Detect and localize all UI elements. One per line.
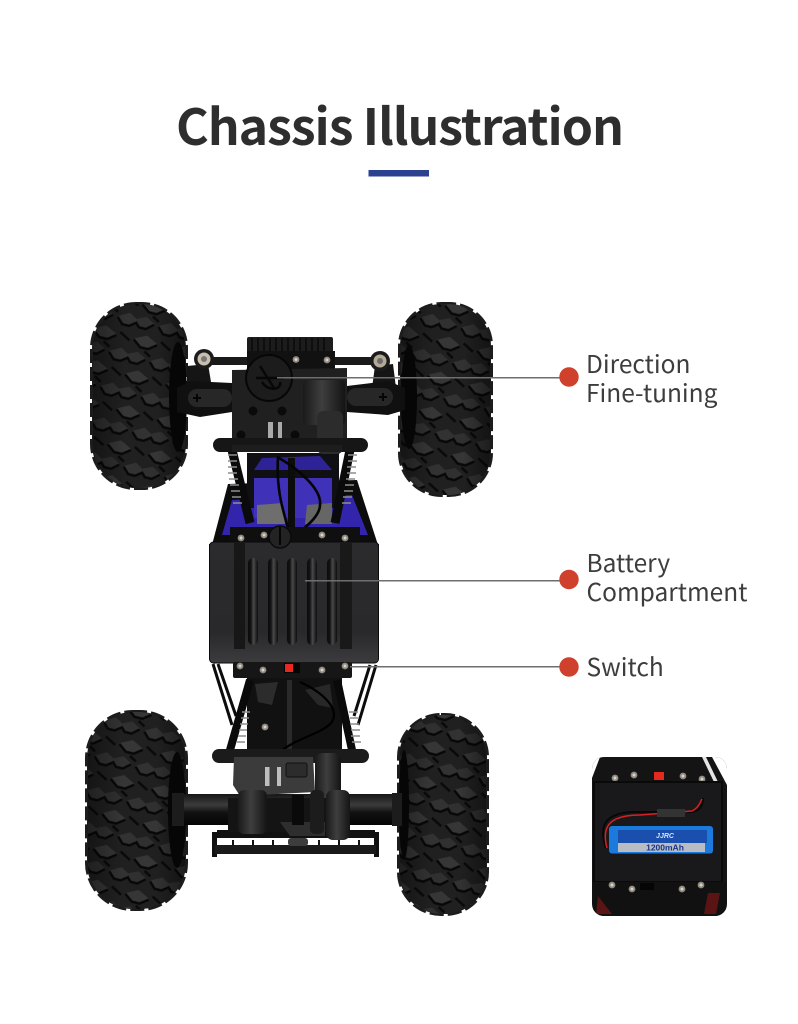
label: battery compartment: Battery: [586, 545, 670, 580]
inset photo: open battery compartment: JJRC: [656, 833, 675, 840]
rear gearbox cover: [233, 757, 315, 796]
marker dot: battery compartment: [559, 570, 579, 589]
tire: rear right: [399, 715, 487, 914]
label: switch: Switch: [586, 649, 664, 684]
inset bottom edge: [593, 909, 726, 916]
label: direction fine-tuning: Fine-tuning: [586, 375, 718, 410]
inset photo: open battery compartment: [592, 757, 727, 916]
tie rod: [204, 357, 380, 365]
inset battery: [609, 826, 713, 854]
tuning dial: [246, 355, 292, 401]
inset photo: open battery compartment: 1200mAh: [646, 842, 684, 852]
title: Chassis Illustration: [176, 88, 624, 160]
top motor block: [247, 337, 333, 353]
axle arms: [177, 381, 232, 417]
differential bulges: [228, 798, 350, 832]
front axle and steering: [177, 337, 405, 454]
motor cylinder: [303, 380, 345, 425]
label: direction fine-tuning: Direction: [586, 346, 690, 381]
inset top switch: [654, 772, 664, 780]
knuckles: [187, 364, 212, 388]
marker dot: switch: [559, 657, 579, 677]
gearbox: [232, 368, 347, 452]
label: battery compartment: Compartment: [586, 574, 747, 609]
rear shock bar: [212, 749, 369, 763]
rear bumper: [212, 830, 379, 857]
diagram: rock crawler chassis: [87, 304, 491, 914]
power switch plate: [233, 662, 352, 678]
tire: front left: [92, 304, 187, 488]
front and rear struts with springs: [228, 450, 361, 750]
tire: front right: [400, 304, 491, 495]
marker dot: direction fine-tuning: [559, 367, 579, 387]
inset compartment box: [594, 782, 722, 882]
leader line: direction fine-tuning: [277, 377, 561, 378]
leader line: battery compartment: [305, 580, 561, 582]
leader line: switch: [350, 666, 561, 668]
blue body and rear frame: [209, 453, 379, 572]
rear frame cage: [213, 664, 376, 753]
inset wires: [603, 798, 703, 848]
tire: rear left: [87, 712, 186, 909]
title accent bar: [368, 170, 429, 176]
rear axle and differential: [172, 749, 402, 846]
battery compartment: [210, 526, 378, 663]
shock mount bar: [213, 438, 368, 452]
